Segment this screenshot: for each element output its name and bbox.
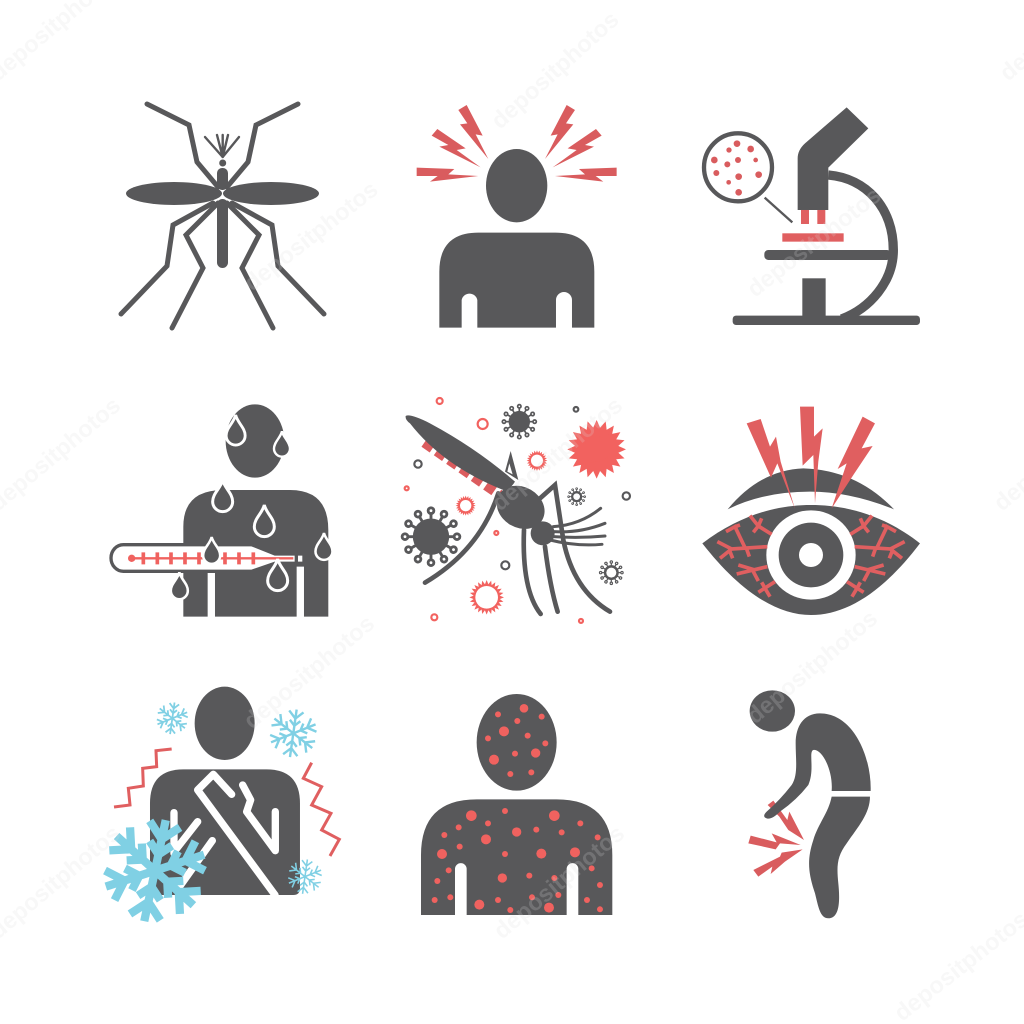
icon: sweating person with thermometer — [111, 404, 332, 617]
icon: headache person — [417, 105, 617, 328]
icon: red eye with lightning — [702, 407, 920, 615]
icon: mosquito top view — [121, 104, 324, 328]
sweat drops — [171, 415, 332, 599]
small rings — [405, 398, 630, 623]
icon: microscope — [704, 107, 920, 325]
icon: person with rash — [421, 694, 612, 915]
red virus bursts — [455, 417, 629, 616]
thermometer — [111, 545, 304, 571]
watermark: depositphotos — [239, 176, 383, 296]
watermark: depositphotos — [489, 820, 629, 944]
icon: chills person with snowflakes — [93, 687, 339, 932]
dark viruses — [402, 405, 623, 584]
icon: mosquito with viruses — [402, 398, 630, 623]
watermark: depositphotos — [742, 605, 882, 729]
icon: person with knee pain — [748, 690, 871, 918]
watermark: depositphotos — [487, 392, 627, 516]
watermark: depositphotos — [742, 182, 886, 302]
watermark: depositphotos — [486, 6, 624, 134]
watermark: depositphotos — [239, 610, 379, 734]
